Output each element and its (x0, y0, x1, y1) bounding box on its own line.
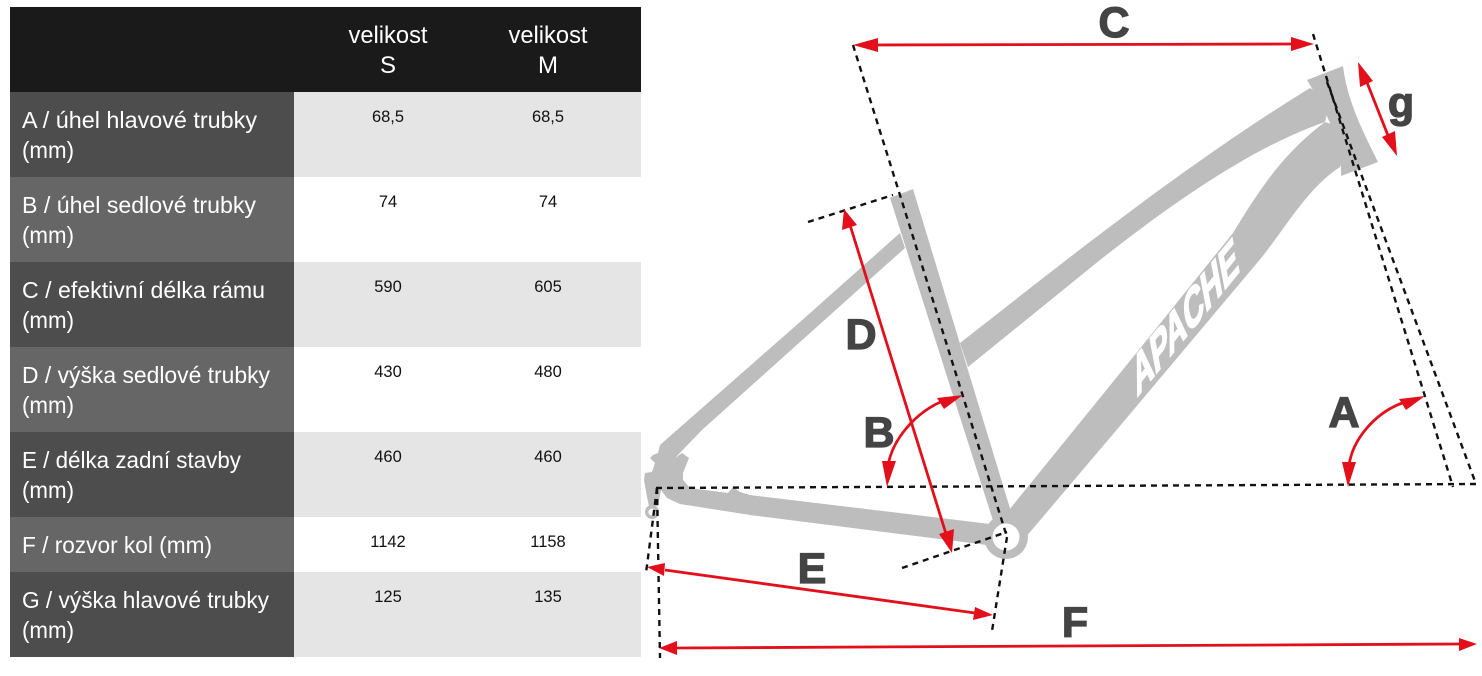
letter F: F (1062, 599, 1088, 647)
table: frame sizes (10, 7, 641, 657)
arrow F (659, 638, 1477, 655)
row G: G / výška hlavové trubky (22, 587, 269, 613)
table header: M (538, 52, 558, 79)
row F: 1158 (530, 533, 566, 551)
row E: 460 (374, 448, 402, 466)
row A (10, 92, 641, 177)
row G: 125 (374, 588, 402, 606)
frame silhouette (644, 66, 1378, 559)
arrow D (842, 209, 954, 553)
row C (10, 262, 641, 347)
row G: (mm) (22, 617, 74, 643)
frame logo APACHE: APACHE (1128, 225, 1242, 408)
arc B (882, 395, 963, 487)
row B: B / úhel sedlové trubky (22, 192, 256, 218)
row F: 1142 (370, 533, 406, 551)
letter C: C (1098, 0, 1130, 47)
arrow g (1358, 62, 1397, 156)
letter D: D (845, 311, 877, 359)
row E: 460 (534, 448, 562, 466)
row E: (mm) (22, 477, 74, 503)
row C: (mm) (22, 307, 74, 333)
row D: D / výška sedlové trubky (22, 362, 270, 388)
row G: 135 (534, 588, 562, 606)
head tube (1307, 66, 1378, 176)
row A: 68,5 (372, 108, 404, 126)
row E (10, 432, 641, 517)
table header: velikost (508, 22, 588, 49)
arrow C (853, 37, 1314, 52)
dropout eye (648, 508, 656, 516)
seat tube (890, 189, 1012, 530)
arc A (1342, 396, 1425, 487)
row G (10, 572, 641, 657)
row F: F / rozvor kol (mm) (22, 532, 212, 558)
row A: 68,5 (532, 108, 564, 126)
bike frame diagram (644, 0, 1477, 658)
row B: 74 (379, 193, 397, 211)
row C: 605 (534, 278, 562, 296)
row F (10, 517, 566, 572)
bottom bracket ring (984, 515, 1028, 559)
row B: (mm) (22, 222, 74, 248)
table header: S (380, 52, 396, 79)
row D: 430 (374, 363, 402, 381)
row D: 480 (534, 363, 562, 381)
letter E: E (798, 545, 826, 593)
row B (10, 177, 557, 262)
row A: A / úhel hlavové trubky (22, 107, 258, 133)
arrow E (647, 563, 993, 620)
row D (10, 347, 562, 432)
rear triangle: seat stay, dropout and chain stay (644, 233, 990, 545)
letter g: g (1388, 79, 1414, 127)
down tube (1005, 122, 1350, 538)
top tube (960, 88, 1330, 367)
row C: C / efektivní délka rámu (22, 277, 265, 303)
dashed construction lines (646, 34, 1476, 658)
dropout eye ring (645, 505, 659, 519)
row A: (mm) (22, 137, 74, 163)
row B: 74 (539, 193, 557, 211)
table header (10, 7, 641, 92)
row C: 590 (374, 278, 402, 296)
table header: velikost (348, 22, 428, 49)
letter B: B (863, 409, 895, 457)
row E: E / délka zadní stavby (22, 447, 241, 473)
row D: (mm) (22, 392, 74, 418)
letter A: A (1328, 389, 1360, 437)
